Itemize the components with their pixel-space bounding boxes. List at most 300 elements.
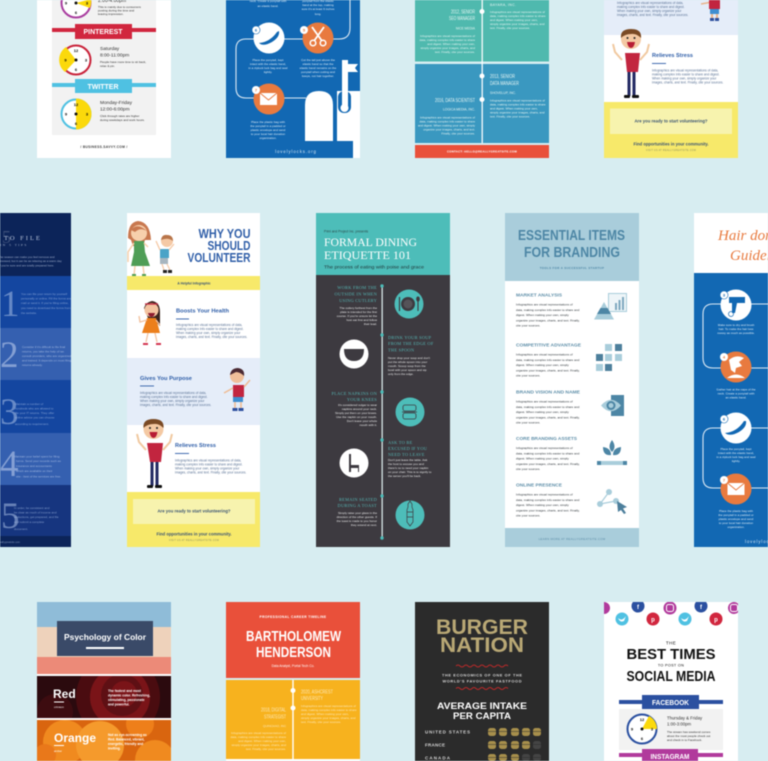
section: boosts your health: Boosts Your Health bbox=[176, 308, 230, 314]
step body text: mouth with it. bbox=[359, 423, 377, 427]
step text: in a ziplock lock bag and seal bbox=[248, 66, 288, 70]
step headings: FROM THE EDGE OF bbox=[388, 341, 434, 346]
step text: plastic envelope and send bbox=[719, 517, 754, 521]
step text: elastic band remains on the bbox=[300, 66, 337, 70]
section: orange: inviting. bbox=[108, 746, 121, 750]
clock: red: 3 bbox=[85, 58, 88, 62]
section: relieves stress: When making your own, simply organize your bbox=[175, 466, 240, 470]
step headings: REMAIN SEATED bbox=[339, 497, 377, 502]
text: purpose bbox=[617, 1, 688, 17]
step body text: plate is intended for the first bbox=[340, 310, 377, 314]
heading: Print and Project Inc. presents bbox=[324, 230, 369, 234]
title bbox=[717, 228, 768, 264]
title: TOOLS FOR A SUCCESSFUL STARTUP bbox=[540, 266, 604, 270]
heading: stressed, but it can be as relaxing as a warm day bbox=[0, 259, 62, 263]
section: red: dynamic color. Refreshing, bbox=[108, 694, 150, 698]
panel: burger nation bbox=[415, 602, 549, 761]
heading: relieves stress: making complex info easier to share and digest. bbox=[652, 72, 720, 76]
title: TO POST ON bbox=[658, 664, 684, 668]
icon: network cursor bbox=[597, 489, 627, 514]
step text: Place the plastic bag with bbox=[719, 509, 753, 513]
banner: pinterest: PINTEREST bbox=[84, 27, 123, 36]
text: facebook time: and check in to Facebook. bbox=[667, 738, 702, 742]
section: relieves stress: images, charts, and text. Finally, cite your sources. bbox=[175, 470, 246, 474]
wavy divider bottom bbox=[456, 688, 508, 690]
section: boosts your health: Infographics are visual representations of data, bbox=[176, 323, 242, 327]
section body text: digest. When making your own, simply bbox=[516, 503, 569, 507]
step headings: YOUR KNEES bbox=[347, 397, 377, 402]
banner: facebook bbox=[619, 695, 723, 709]
section: gives you purpose: images, charts, and text. Finally, cite your sources. bbox=[140, 403, 211, 407]
step body text: mouth. Scoop soup from the bbox=[388, 364, 426, 368]
section body text: cite your sources. bbox=[516, 324, 540, 328]
title bbox=[246, 615, 342, 668]
icon: scissors 5: 5 bbox=[303, 28, 306, 32]
step text: the ponytail in a padded or bbox=[250, 124, 286, 128]
title: Data Analyst, Portal Tech Co. bbox=[272, 664, 314, 668]
tip 5: deductions, get prepared, and file bbox=[14, 515, 59, 519]
section: red bbox=[36, 675, 172, 720]
tip 1: 1 bbox=[1, 284, 20, 325]
title: ESSENTIAL ITEMS bbox=[518, 227, 625, 244]
icon: ponytail: 6 bbox=[723, 416, 726, 422]
step body text: the server you'll be back. bbox=[388, 474, 421, 478]
section: red: stimulating, passionate bbox=[108, 698, 145, 702]
clock: magenta bbox=[62, 0, 91, 18]
clock: magenta: 3 bbox=[86, 0, 89, 6]
gray panel bbox=[619, 709, 723, 750]
tip 3: Maintain a number of bbox=[15, 402, 43, 406]
clock: twitter: 3 bbox=[86, 112, 89, 116]
section headings: CORE BRANDING ASSETS bbox=[516, 436, 577, 441]
timeline text: and digest. When making your own, bbox=[238, 739, 286, 743]
section: orange: Not as eye-screaming as bbox=[108, 733, 147, 737]
timeline text: Infographics are visual representations of bbox=[301, 704, 356, 708]
section: gives you purpose bbox=[140, 376, 211, 407]
illustration: boy relieved bbox=[137, 419, 172, 488]
icon: envelope bbox=[720, 474, 752, 504]
illustration: boy relieved bbox=[613, 29, 649, 98]
icon: envelope: 7 bbox=[723, 478, 726, 482]
heading: IN 5 TIPS bbox=[0, 243, 28, 247]
step body text: Simply raise your glass in the bbox=[338, 511, 377, 515]
chart: row labels: FRANCE bbox=[425, 742, 445, 748]
footer text: LEARN MORE AT REALLYGREATSITE.COM bbox=[539, 537, 606, 541]
section body text: cite your sources. bbox=[516, 374, 540, 378]
panel: professional career timeline bbox=[226, 602, 360, 761]
tip 2 bbox=[1, 342, 72, 368]
clock: magenta: 6 bbox=[75, 10, 78, 15]
tip 2: 2 bbox=[0, 335, 18, 376]
step text: plastic envelope and send bbox=[251, 128, 286, 132]
section: orange bbox=[36, 719, 172, 761]
step text bbox=[248, 0, 337, 140]
tip 1: you need to download the forms from bbox=[21, 306, 71, 310]
timeline text: simply organize your images, charts, and bbox=[420, 46, 475, 50]
step text: intact with the elastic band, bbox=[250, 62, 286, 66]
heading bbox=[324, 230, 425, 270]
tip 3 bbox=[1, 398, 55, 426]
text: facebook time: The stream has weekend comes bbox=[667, 730, 711, 734]
tip 3: according to requirement. bbox=[15, 422, 49, 426]
timeline text: SEO MANAGER bbox=[449, 16, 475, 22]
step body text: The cutlery furthest from the bbox=[339, 306, 377, 310]
section: relieves stress bbox=[175, 443, 246, 474]
section body text: data, making complex info easier to share and bbox=[516, 358, 580, 362]
heading: TO FILE bbox=[4, 235, 42, 242]
clock: twitter: 6 bbox=[75, 121, 78, 126]
timeline text: 2018, DIGITAL bbox=[261, 708, 286, 714]
panel: essential items for branding bbox=[505, 213, 639, 547]
section body text: cite your sources. bbox=[516, 514, 540, 518]
heading: relieves stress: Infographics are visual representations of data, bbox=[652, 68, 718, 72]
panel: volunteer (top) bbox=[604, 0, 738, 158]
timeline text: and digest. When making your own, bbox=[301, 712, 349, 716]
title: BARTHOLOMEW bbox=[246, 628, 342, 645]
section: gives you purpose: Infographics are visual representations of data, bbox=[140, 391, 206, 395]
step text: Place the ponytail, kept bbox=[252, 58, 284, 62]
social icons: f bbox=[637, 605, 640, 611]
section body text: cite your sources. bbox=[516, 420, 540, 424]
section: red: crimson bbox=[54, 705, 64, 709]
clock: red: 12 bbox=[74, 48, 79, 53]
section body text: data, making complex info easier to share and bbox=[516, 405, 580, 409]
step text: the ponytail in a padded or bbox=[718, 513, 754, 517]
heading: 5 bbox=[2, 227, 11, 247]
heading: relieves stress: images, charts, and text. Finally, cite your sources. bbox=[652, 80, 723, 84]
heading: relieves stress bbox=[652, 53, 723, 84]
icon: toast glass bbox=[396, 500, 424, 530]
connector path bbox=[703, 304, 768, 488]
section: gives you purpose: Gives You Purpose bbox=[140, 376, 192, 382]
tip 5: 5 bbox=[1, 496, 20, 537]
icon: squares bbox=[596, 344, 622, 371]
icon: napkin bbox=[396, 398, 424, 426]
step body text: on your chair. This is to signify to bbox=[388, 470, 432, 474]
tip 4: 4 bbox=[0, 444, 18, 485]
panel: best times to post bbox=[598, 600, 740, 761]
step text: sure it's at least 6 inches bbox=[302, 7, 335, 11]
section body text: Infographics are visual representations of bbox=[516, 302, 573, 306]
section body text: organize your images, charts, and text. Finally, bbox=[516, 318, 580, 322]
section headings: BRAND VISION AND NAME bbox=[516, 390, 580, 394]
title: PROFESSIONAL CAREER TIMELINE bbox=[260, 615, 327, 619]
section body text: Infographics are visual representations of bbox=[516, 400, 573, 404]
section: red: and powerful. bbox=[108, 702, 130, 706]
step text: ponytail when cutting and bbox=[301, 70, 335, 74]
title bbox=[436, 616, 528, 657]
timeline text: Infographics are visual representations of bbox=[420, 116, 475, 120]
timeline text: simply organize your images, charts, and bbox=[490, 22, 545, 26]
section body text: digest. When making your own, simply bbox=[516, 456, 569, 460]
icon: eye bbox=[601, 395, 624, 416]
timeline text: 2013, SENIOR bbox=[490, 74, 515, 80]
timeline text: 2016, DATA SCIENTIST bbox=[435, 98, 475, 104]
heading: relieves stress: When making your own, simply organize your bbox=[652, 76, 717, 80]
timeline text: UNIVERSITY bbox=[301, 696, 323, 702]
section: relieves stress: Relieves Stress bbox=[175, 443, 216, 449]
timeline text: DATA MANAGER bbox=[490, 81, 519, 87]
call to action: Find opportunities in your community. bbox=[156, 532, 232, 536]
banner: twitter: TWITTER bbox=[88, 82, 119, 91]
tip 5 bbox=[2, 503, 59, 530]
text: morning time: This is mainly due to consumers bbox=[98, 5, 141, 9]
tip 4: site - best of the services are free. bbox=[16, 474, 61, 478]
section: orange: amber bbox=[54, 749, 62, 753]
icon: pyramid chart bbox=[594, 294, 626, 320]
tip 3: file your IT returns. They offer bbox=[15, 411, 54, 415]
text: pinterest time bbox=[100, 46, 146, 68]
tip 5: In order, be consistent and bbox=[14, 506, 50, 510]
step text: elastic band so that the bbox=[303, 62, 334, 66]
step text: an elastic band. bbox=[257, 4, 279, 8]
step headings: NEED TO LEAVE bbox=[388, 452, 425, 457]
text: morning time: leaving impression. bbox=[98, 12, 124, 16]
heading bbox=[0, 227, 62, 268]
timeline text: Infographics are visual representations of bbox=[490, 10, 545, 14]
timeline text: organize your images, charts, and text. bbox=[423, 128, 475, 132]
section: relieves stress: Infographics are visual representations of data, bbox=[175, 458, 241, 462]
timeline text: text. Finally, cite your sources. bbox=[301, 720, 341, 724]
tip 5: be clear as much of income and bbox=[14, 510, 57, 514]
text: pinterest time: 8:00-11:00pm bbox=[100, 52, 129, 58]
tip 5: document. bbox=[14, 527, 28, 531]
step body text: their lead. bbox=[364, 322, 377, 326]
step text: an elastic band. bbox=[725, 396, 747, 400]
section body text: digest. When making your own, simply bbox=[516, 363, 569, 367]
title: FOR BRANDING bbox=[524, 244, 620, 261]
tip 4: forms. Send your records such as bbox=[16, 459, 61, 463]
text: morning time: posting during the time and bbox=[98, 8, 135, 12]
title: WHY YOU bbox=[198, 226, 250, 241]
clock: red bbox=[59, 46, 90, 74]
section: boosts your health bbox=[176, 308, 247, 339]
timeline text: text. Finally, cite your sources. bbox=[435, 50, 475, 54]
wavy divider top bbox=[456, 665, 508, 667]
timeline text bbox=[418, 3, 546, 136]
icon: hair profile: 4 bbox=[723, 354, 726, 360]
clock: twitter: 12 bbox=[74, 102, 79, 107]
timeline bbox=[380, 284, 384, 540]
panel: why you should volunteer bbox=[127, 213, 260, 547]
step text: long. bbox=[315, 12, 321, 16]
step headings: EXCUSED IF YOU bbox=[388, 446, 428, 451]
section: relieves stress: making complex info easier to share and digest. bbox=[175, 462, 243, 466]
timeline text: simply organize your images, charts, and bbox=[490, 110, 545, 114]
section body text: Infographics are visual representations of bbox=[516, 492, 573, 496]
panel: social media best times (top) bbox=[37, 0, 171, 158]
timeline text: text. Finally, cite your sources. bbox=[490, 26, 530, 30]
call to action: Find opportunities in your community. bbox=[634, 142, 708, 146]
tip 2: Consider if it's difficult to file final bbox=[22, 345, 66, 349]
text: purpose: Infographics are visual representations of data, bbox=[617, 1, 683, 5]
clock: magenta: 9 bbox=[65, 0, 68, 6]
step text: neck. Create a ponytail with bbox=[718, 392, 755, 396]
text: twitter time: 12:00-6:00pm bbox=[100, 106, 130, 112]
social icons: p bbox=[714, 618, 718, 624]
tip 2: and trained. It depends on most filing bbox=[22, 358, 72, 362]
chart: burger pictogram bbox=[488, 728, 541, 761]
step body text: Don't leave your whole bbox=[347, 419, 377, 423]
step body text: Use the napkin on your mouth. bbox=[336, 415, 377, 419]
section body text: organize your images, charts, and text. Finally, bbox=[516, 462, 580, 466]
text: facebook time bbox=[667, 716, 711, 742]
clock: facebook: 9 bbox=[631, 726, 634, 732]
timeline text: 2012, SENIOR bbox=[451, 10, 475, 16]
section headings: MARKET ANALYSIS bbox=[516, 292, 562, 298]
section: gives you purpose: When making your own, simply organize your bbox=[140, 399, 205, 403]
text: pinterest time: relax & pin. bbox=[100, 64, 115, 68]
call to action bbox=[634, 118, 708, 152]
text: purpose: making complex info easier to share and digest. bbox=[617, 5, 685, 9]
section: red: The fastest and most bbox=[108, 689, 142, 693]
tip 3: 3 bbox=[0, 392, 18, 433]
illustration: mailbox bbox=[305, 60, 360, 158]
section body text: cite your sources. bbox=[516, 467, 540, 471]
subtitle band text: A Helpful Infographic bbox=[177, 282, 211, 286]
section: boosts your health: images, charts, and text. Finally, cite your sources. bbox=[176, 335, 247, 339]
text: facebook time: Thursday & Friday bbox=[667, 716, 703, 720]
timeline text: QUINCHAO, INC bbox=[263, 724, 287, 728]
step text: keeps, not hair together. bbox=[302, 74, 334, 78]
timeline text: text. Finally, cite your sources. bbox=[490, 114, 530, 118]
tip 1 bbox=[4, 291, 71, 316]
step body text: the host to excuse you and bbox=[388, 462, 424, 466]
timeline text: 2020, ASHCREST bbox=[301, 690, 333, 696]
timeline text: data, making complex info easier to share bbox=[230, 735, 286, 739]
tip 5: and submit a complete bbox=[14, 520, 45, 524]
timeline text: simply organize your images, charts, and bbox=[301, 716, 356, 720]
tip 3: hundreds who are allowed to bbox=[15, 406, 54, 410]
section: gives you purpose: making complex info easier to share and digest. bbox=[140, 395, 208, 399]
chart: row labels: CANADA bbox=[425, 756, 451, 760]
step body text: there's no to need your napkin bbox=[388, 466, 429, 470]
text: purpose: images, charts, and text. Finally, cite your sources. bbox=[617, 13, 688, 17]
call to action: Are you ready to start volunteering? bbox=[158, 508, 231, 514]
section body text: organize your images, charts, and text. Finally, bbox=[516, 416, 580, 420]
icon: ponytail bbox=[720, 412, 752, 444]
title bbox=[518, 227, 625, 270]
timeline text: STRATEGIST bbox=[264, 714, 286, 720]
panel: hair donation guidelines bbox=[694, 213, 768, 547]
icon: envelope 7: 7 bbox=[255, 88, 258, 92]
subtitle bbox=[442, 672, 522, 684]
section headings bbox=[516, 292, 581, 488]
step headings: OUTSIDE IN WHEN bbox=[335, 292, 378, 296]
clock: facebook: 3 bbox=[651, 726, 654, 732]
heading: if you're sure and are totally prepared here. bbox=[0, 264, 54, 268]
panel: psychology of color bbox=[34, 602, 175, 761]
step body text: put the whole spoon into your bbox=[388, 360, 427, 364]
step body text: bowl with your spoon and sip bbox=[388, 368, 427, 372]
timeline text: text. Finally, cite your sources. bbox=[246, 747, 286, 751]
banner: instagram bbox=[619, 749, 723, 761]
step text: intact with the elastic band, bbox=[718, 451, 754, 455]
heading: FORMAL DINING bbox=[324, 235, 417, 249]
social icons bbox=[598, 600, 740, 626]
banner: instagram: INSTAGRAM bbox=[650, 754, 690, 761]
step text: tightly. bbox=[732, 459, 740, 463]
footer text: / BUSINESS.SAVVY.COM / bbox=[80, 145, 128, 149]
step text: Make sure to dry and brush bbox=[718, 323, 755, 327]
step body text: Don't just leave the table. Ask bbox=[388, 458, 428, 462]
panel: navy tips (left, cropped) bbox=[0, 213, 72, 547]
timeline text: and digest. When making your own, bbox=[427, 42, 475, 46]
call to action bbox=[156, 508, 232, 542]
social icons: p bbox=[651, 618, 655, 624]
step body text: Never drop your soup and don't bbox=[388, 356, 430, 360]
step text: Cut the tail just above the bbox=[301, 58, 335, 62]
section body text: organize your images, charts, and text. Finally, bbox=[516, 508, 580, 512]
call to action: VISIT US AT REALLYGREATSITE.COM bbox=[646, 149, 696, 152]
text: facebook time: about the most people check out bbox=[667, 734, 711, 738]
timeline text: and digest. When making your own, bbox=[490, 106, 538, 110]
footer url: lovelylocks.org bbox=[275, 149, 317, 154]
timeline text: Finally, cite your sources. bbox=[441, 132, 475, 136]
panel: formal dining etiquette bbox=[316, 213, 450, 547]
tip 1: personally or online. Fill the forms and bbox=[21, 296, 72, 300]
title: VOLUNTEER bbox=[188, 250, 251, 265]
icon: ponytail 6: 6 bbox=[255, 28, 258, 32]
step text: in a ziplock lock bag and seal bbox=[716, 455, 756, 459]
timeline text: data, making complex info easier to share bbox=[490, 14, 546, 18]
section headings: COMPETITIVE ADVANTAGE bbox=[516, 342, 581, 348]
tip 2: returns, you take the help of tax bbox=[22, 350, 65, 354]
icon: leaves bbox=[597, 440, 627, 465]
step body text: course. If you're unsure let the bbox=[337, 314, 377, 318]
icon: envelope 7 bbox=[252, 84, 284, 114]
timeline text: BAYARA, INC. bbox=[490, 3, 516, 7]
text: twitter time bbox=[100, 100, 145, 122]
step body text: direction of the other guests. If bbox=[337, 515, 377, 519]
step text: organization. bbox=[259, 136, 277, 140]
title: HENDERSON bbox=[256, 644, 331, 661]
section body text: organize your images, charts, and text. Finally, bbox=[516, 368, 580, 372]
tip 4: Maintain your belief spent for filing bbox=[14, 454, 60, 458]
tip 4: which are available on their bbox=[16, 469, 52, 473]
step body text: only from the edge. bbox=[388, 372, 414, 376]
section body text: Infographics are visual representations of bbox=[516, 352, 573, 356]
heading: relieves stress: Relieves Stress bbox=[652, 53, 693, 59]
text: twitter time: during weekdays and work hours. bbox=[100, 118, 145, 122]
tip 1: the website. bbox=[21, 311, 37, 315]
section body text: data, making complex info easier to share and bbox=[516, 498, 580, 502]
timeline text: SHOVELUP, INC. bbox=[490, 91, 516, 95]
section: orange: Orange bbox=[54, 731, 96, 745]
step body text: It's considered vulgar to wear bbox=[338, 403, 377, 407]
section: orange: Red. Balanced, vibrant, bbox=[108, 738, 145, 742]
footer contact: CONTACT: HELLO@REALLYGREATSITE.COM bbox=[447, 150, 517, 154]
text: morning time bbox=[98, 0, 141, 16]
illustration: girl bbox=[139, 301, 161, 345]
clock: facebook: 12 bbox=[640, 717, 645, 722]
section body text: data, making complex info easier to share and bbox=[516, 308, 580, 312]
section: boosts your health: When making your own, simply organize your bbox=[176, 331, 241, 335]
icon: scissors 5 bbox=[300, 22, 334, 54]
timeline text: and digest. When making your own, bbox=[490, 18, 538, 22]
title box bbox=[57, 621, 153, 656]
banner: twitter bbox=[52, 79, 156, 93]
clock: facebook: 6 bbox=[641, 736, 644, 741]
step body text bbox=[335, 306, 432, 527]
tip 1: You can file your return by yourself bbox=[21, 292, 67, 296]
banner: facebook: FACEBOOK bbox=[652, 700, 689, 707]
section headings: ONLINE PRESENCE bbox=[516, 482, 562, 488]
timeline text: Infographics are visual representations of bbox=[490, 98, 545, 102]
text: twitter time: Click through rates are higher bbox=[100, 114, 139, 118]
step body text: the toast is made to you honor bbox=[337, 519, 377, 523]
heading: The process of eating with poise and grace bbox=[324, 264, 425, 270]
